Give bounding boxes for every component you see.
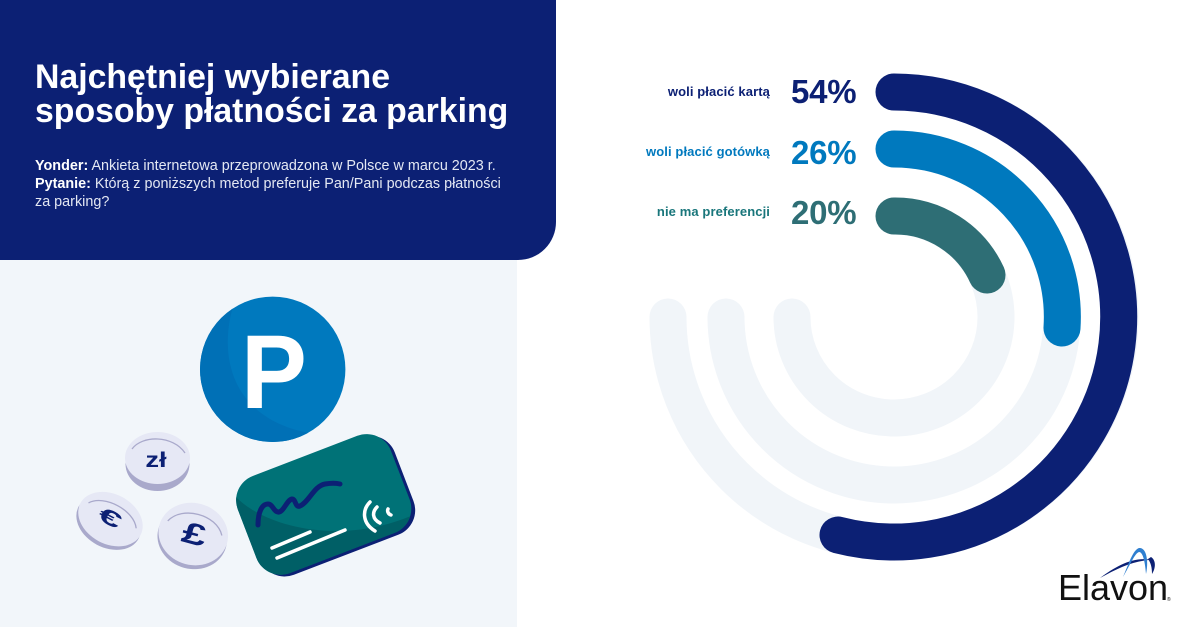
survey description: Yonder: Ankieta internetowa przeprowadzona w Polsce w marcu 2023 r. <box>35 158 496 174</box>
arc: 20% no preference <box>894 216 987 275</box>
label: no preference: nie ma preferencji <box>657 204 770 219</box>
icon: pound coin: £ <box>178 514 211 553</box>
track: inner <box>792 216 996 418</box>
logo: Elavon <box>1058 548 1171 607</box>
title: sposoby płatności za parking <box>35 92 508 130</box>
track: outer <box>668 92 1120 542</box>
title: Najchętniej wybierane <box>35 58 390 96</box>
survey description <box>35 158 501 210</box>
logo wordmark: Elavon <box>1058 567 1168 607</box>
label: card: woli płacić kartą <box>668 84 770 99</box>
registered mark: ® <box>1167 596 1171 603</box>
icon: parking sign <box>200 296 346 442</box>
signature <box>258 483 340 525</box>
logo arc mark <box>1100 548 1155 578</box>
title <box>35 58 508 130</box>
contactless waves <box>365 502 391 531</box>
track: middle <box>726 149 1062 485</box>
icon: euro coin <box>67 481 152 561</box>
card number lines <box>272 530 345 558</box>
value: 20%: 20% <box>791 194 856 231</box>
arc: 26% cash <box>894 149 1062 328</box>
icon: pound coin <box>150 495 235 577</box>
value: 54%: 54% <box>791 73 856 110</box>
survey description: za parking? <box>35 194 109 210</box>
icon: euro coin: € <box>94 502 126 534</box>
icon: payment card <box>236 434 416 576</box>
label: cash: woli płacić gotówką <box>646 144 770 159</box>
icon: parking sign: P <box>241 313 307 431</box>
arc: 54% card <box>838 92 1119 542</box>
panel: header <box>0 0 556 260</box>
panel: illustration background <box>0 250 517 627</box>
icon: zloty coin <box>125 432 190 491</box>
icon: zloty coin: zł <box>145 449 167 472</box>
value: 26%: 26% <box>791 134 856 171</box>
survey description: Pytanie: Którą z poniższych metod preferuje Pan/Pani podczas płatności <box>35 176 501 192</box>
illustration: parking and payment <box>76 296 416 576</box>
